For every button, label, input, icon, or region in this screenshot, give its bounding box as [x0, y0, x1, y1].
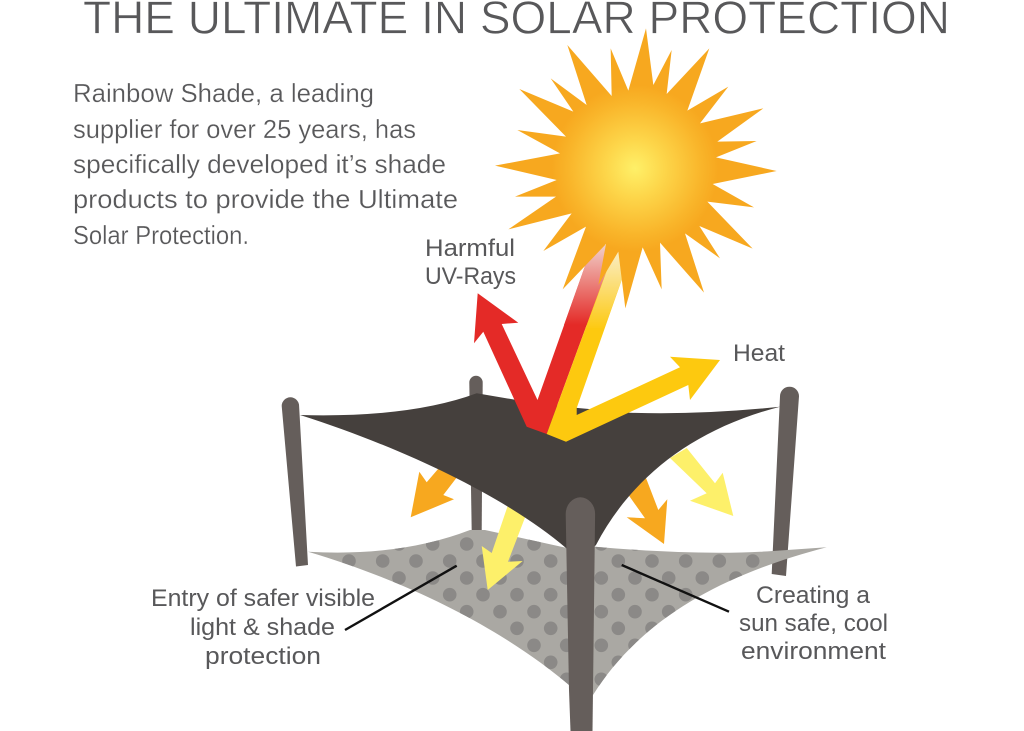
- front post: [566, 497, 595, 731]
- sun: [495, 28, 777, 308]
- arrow: yellow heat reflected: [547, 245, 720, 442]
- label: Harmful UV-Rays: [425, 235, 516, 290]
- label: Creating a sun safe environment: [739, 582, 888, 665]
- intro text block: Solar Protection.: [73, 220, 249, 250]
- rear post: [469, 376, 483, 531]
- leader line: right: [622, 565, 729, 612]
- arrow: orange left downward: [411, 467, 457, 517]
- label: Entry of safer visible light: protection: [205, 643, 321, 670]
- label: Creating a sun safe environment: Creating a: [756, 582, 871, 609]
- shade sail: [300, 393, 780, 560]
- label: Harmful UV-Rays: UV-Rays: [425, 263, 516, 290]
- arrow: pale yellow right downward: [670, 448, 733, 516]
- label: Creating a sun safe environment: environment: [741, 638, 886, 665]
- intro text block: [73, 78, 458, 250]
- intro text block: specifically developed it’s shade: [73, 149, 446, 179]
- label: Entry of safer visible light: Entry of safer visible: [151, 585, 375, 612]
- leader line: left: [345, 566, 457, 630]
- label: Harmful UV-Rays: Harmful: [425, 235, 515, 262]
- left post: [282, 397, 308, 566]
- arrow: orange right downward: [625, 478, 667, 544]
- intro text block: supplier for over 25 years, has: [73, 114, 416, 144]
- intro text block: Rainbow Shade, a leading: [73, 78, 374, 108]
- label: Entry of safer visible light: [151, 585, 375, 670]
- arrow: pale yellow centre downward: [482, 505, 526, 590]
- label: Heat: Heat: [733, 340, 785, 367]
- arrow: red UV ray reflected: [474, 245, 616, 434]
- label: Entry of safer visible light: light & shade: [190, 614, 335, 641]
- right post: [772, 387, 799, 576]
- intro text block: products to provide the Ultimate: [73, 184, 458, 214]
- label: Creating a sun safe environment: sun safe, cool: [739, 610, 888, 637]
- ground shade with dots: [308, 530, 827, 695]
